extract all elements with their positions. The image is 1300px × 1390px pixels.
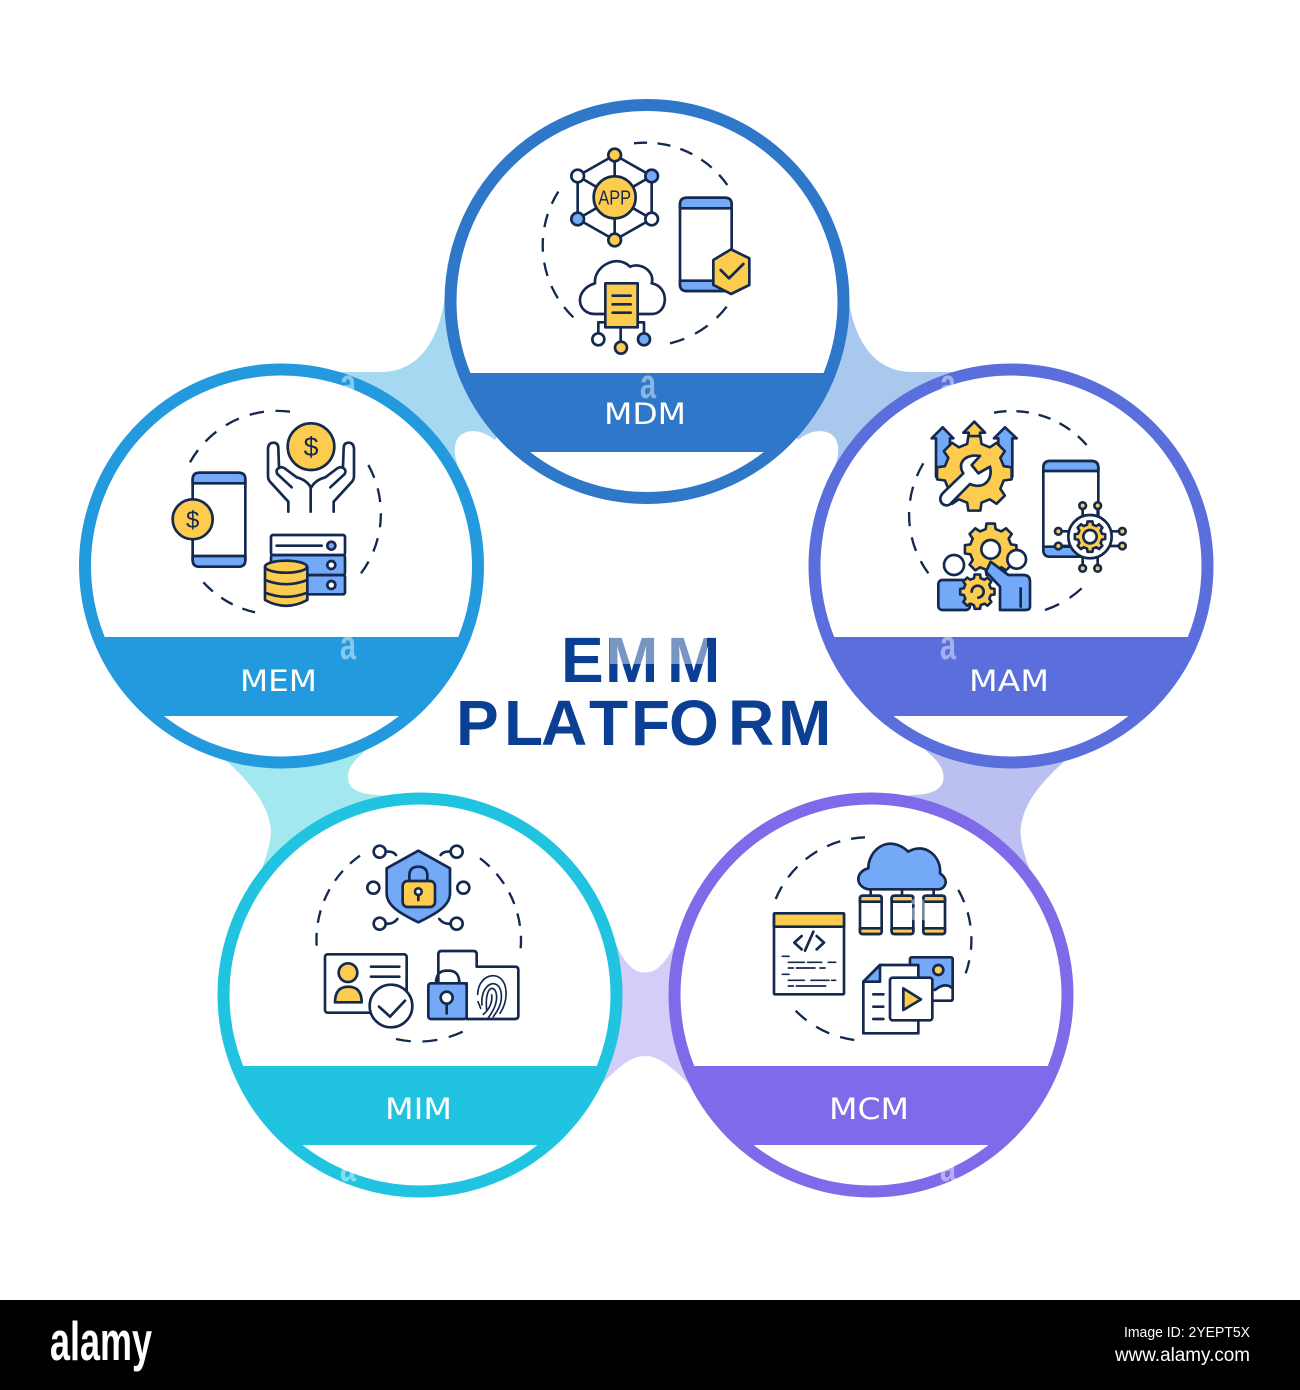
label: MCM: MCM <box>829 1092 909 1126</box>
band: MDM <box>470 373 824 452</box>
band: MCM <box>694 1066 1048 1145</box>
panel: MAM <box>805 370 1219 762</box>
panel: MEM <box>75 370 489 762</box>
stock watermark marks: a <box>640 360 656 407</box>
connector: MEM to MIM <box>220 740 420 885</box>
icon: MEM phone payment, hands with coin, servers <box>173 411 381 612</box>
label: MAM: MAM <box>969 664 1049 698</box>
title: EMM <box>561 624 720 696</box>
connector: MIM to MCM <box>599 945 692 1087</box>
stock watermark marks: a <box>340 621 356 668</box>
stock watermark marks: a <box>909 882 927 929</box>
icon: MCM cloud devices, code window and media files <box>774 837 971 1040</box>
icon: MAM gear with wrench, team and phone settings <box>909 411 1126 610</box>
stock watermark marks <box>340 360 956 1190</box>
band: MIM <box>243 1066 597 1145</box>
title: PLATFORM <box>456 687 831 759</box>
panel: MCM <box>665 798 1079 1192</box>
icon: MIM shield lock, ID card and fingerprint folder <box>316 846 521 1042</box>
connector: MEM to MDM <box>335 290 530 490</box>
stock watermark marks: a <box>340 1143 356 1190</box>
footer bar <box>0 1300 1300 1390</box>
band: MAM <box>834 637 1188 716</box>
label: MDM: MDM <box>604 397 686 431</box>
panel: MDM <box>440 105 854 498</box>
label: MEM: MEM <box>240 664 317 698</box>
label: MIM: MIM <box>385 1092 452 1126</box>
title <box>456 624 831 759</box>
icon: MDM app network, cloud and secure phone: APP <box>598 188 631 210</box>
band: MEM <box>104 637 458 716</box>
stock watermark marks: a <box>940 621 956 668</box>
icon: MEM phone payment, hands with coin, servers: $ <box>186 507 199 534</box>
stock watermark marks: a <box>940 360 956 407</box>
icon: MEM phone payment, hands with coin, servers: $ <box>304 432 319 462</box>
icon: MDM app network, cloud and secure phone <box>543 143 749 354</box>
footer url: www.alamy.com <box>1114 1345 1250 1366</box>
stock watermark marks: a <box>340 360 356 407</box>
footer logo: alamy <box>50 1310 152 1372</box>
connector: MAM to MCM <box>871 740 1071 885</box>
stock watermark marks: a <box>940 1143 956 1190</box>
connector: MDM to MAM <box>763 290 958 490</box>
footer image id: Image ID: 2YEPT5X <box>1124 1324 1250 1341</box>
panel: MIM <box>214 798 628 1192</box>
